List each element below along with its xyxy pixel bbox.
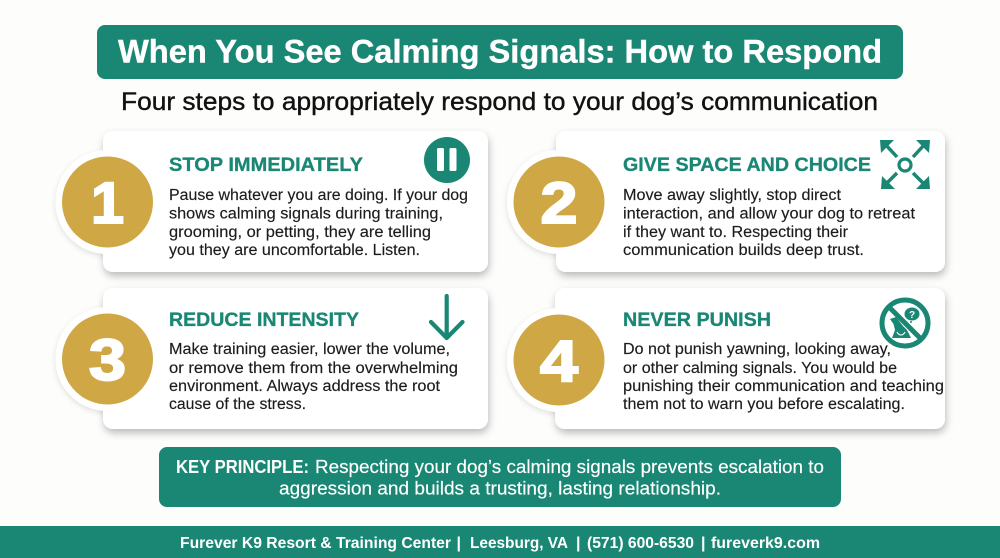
card background 2: [507, 131, 945, 272]
icon: no punishment: ?: [909, 310, 915, 321]
body text 1: [169, 187, 468, 259]
body text 3: or remove them from the overwhelming: [169, 360, 458, 377]
body text 4: punishing their communication and teaching: [623, 378, 944, 395]
body text 2: if they want to. Respecting their: [623, 224, 848, 241]
footer: |: [701, 535, 705, 552]
number badge 1: 1: [91, 171, 124, 236]
heading: stop immediately: STOP IMMEDIATELY: [169, 154, 363, 176]
body text 4: [623, 341, 944, 413]
number badge 2: [514, 156, 604, 248]
panel: step 3 reduce intensity: [56, 288, 488, 429]
body text 4: or other calming signals. You would be: [623, 360, 897, 377]
panel: step 2 give space and choice: [507, 131, 945, 272]
body text 2: interaction, and allow your dog to retreat: [623, 206, 916, 222]
heading: never punish: NEVER PUNISH: [623, 309, 771, 331]
body text 3: environment. Always address the root: [169, 378, 441, 395]
body text 2: Move away slightly, stop direct: [623, 187, 842, 204]
body text 3: Make training easier, lower the volume,: [169, 341, 450, 358]
callout: key principle: [159, 447, 841, 507]
body text 3: cause of the stress.: [169, 396, 306, 413]
body text 1: Pause whatever you are doing. If your dog: [169, 187, 468, 204]
panel: step 4 never punish: [507, 288, 945, 429]
number badge 3: 3: [89, 328, 126, 393]
number badge 1: [62, 156, 153, 248]
callout: key principle: KEY PRINCIPLE:: [176, 457, 309, 477]
callout: key principle: aggression and builds a trusting, lasting relationship.: [279, 478, 721, 498]
card background 3: [56, 288, 488, 429]
body text 1: you they are uncomfortable. Listen.: [169, 242, 420, 259]
footer: fureverk9.com: [711, 535, 820, 552]
card background 1: [56, 131, 488, 272]
footer: Furever K9 Resort & Training Center: [180, 535, 451, 552]
body text 1: grooming, or petting, they are telling: [169, 224, 431, 241]
footer: |: [576, 535, 580, 552]
heading: give space and choice: GIVE SPACE AND CHOICE: [623, 154, 871, 176]
body text 1: shows calming signals during training,: [169, 206, 443, 222]
number badge 4: [514, 314, 604, 406]
footer: |: [456, 535, 461, 552]
body text 3: [169, 341, 458, 413]
heading: reduce intensity: REDUCE INTENSITY: [169, 309, 359, 331]
title: When You See Calming Signals: How to Respond: [118, 34, 882, 70]
icon: down arrow: [431, 296, 462, 338]
panel: step 1 stop immediately: [56, 131, 488, 272]
body text 4: Do not punish yawning, looking away,: [623, 341, 891, 358]
body text 2: [623, 187, 916, 259]
number badge 4: 4: [540, 329, 578, 394]
number badge 2: 2: [540, 171, 578, 236]
icon: pause: [424, 137, 470, 183]
icon: arrows outward: [880, 140, 930, 189]
card background 4: [507, 288, 945, 429]
callout: key principle: Respecting your dog’s calming signals prevents escalation to: [315, 457, 824, 477]
footer: Leesburg, VA: [470, 535, 568, 552]
footer: [0, 526, 1000, 558]
icon: no punishment: [882, 300, 928, 346]
subtitle: Four steps to appropriately respond to your dog’s communication: [121, 88, 878, 116]
body text 2: communication builds deep trust.: [623, 242, 864, 259]
title: [97, 25, 903, 79]
number badge 3: [62, 314, 153, 404]
footer: (571) 600-6530: [587, 535, 694, 552]
body text 4: them not to warn you before escalating.: [623, 396, 905, 413]
